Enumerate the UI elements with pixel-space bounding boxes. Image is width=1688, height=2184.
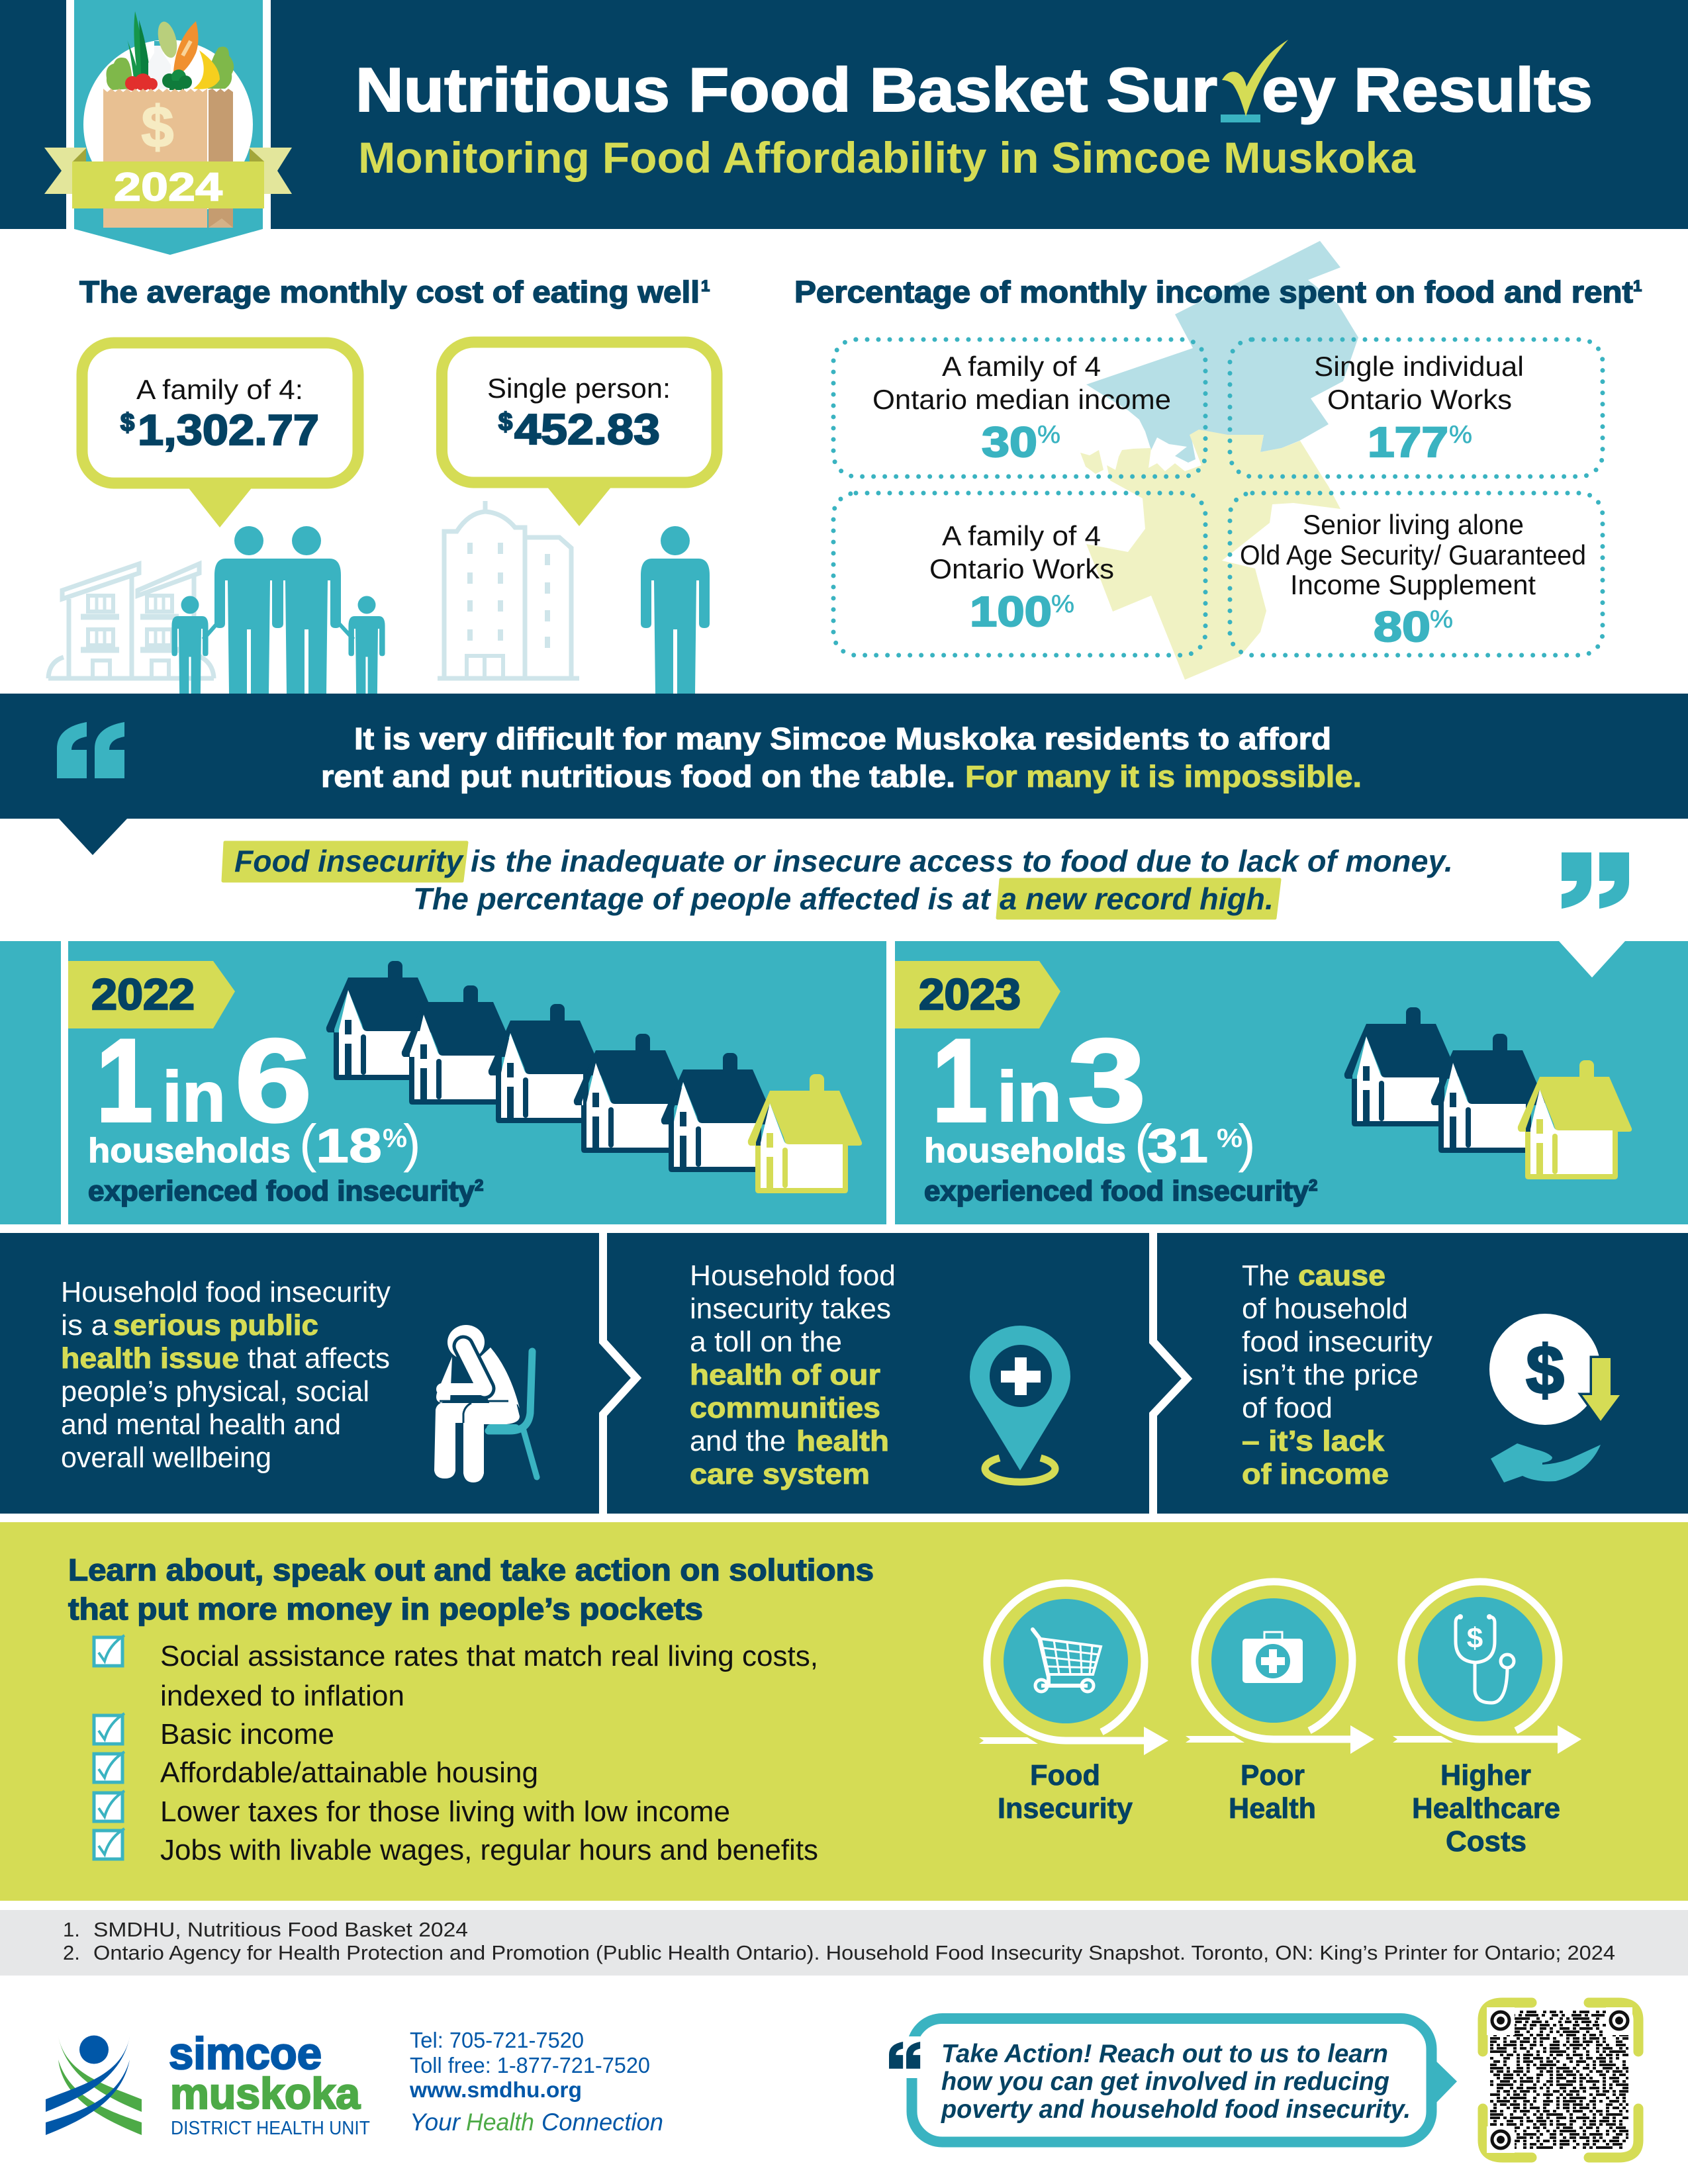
contact details: Tel: 705-721-7520 [410,2028,584,2052]
card: single individual [1230,340,1603,477]
card: single individual: 177 [1368,418,1448,466]
quote text: It is very difficult for many Simcoe Muskoka residents to afford [354,721,1331,756]
callout: single person cost: $ [498,408,512,436]
panel: percentage of income [794,275,1642,655]
icon: opening quote mark [57,722,124,778]
text: toll on communities: Household food [690,1259,896,1292]
footnotes band: 1. [63,1918,80,1941]
icon: stethoscope with dollar: $ [1467,1622,1483,1655]
footnotes band [0,1910,1688,1976]
stat: 1 in 6: 6 [235,1015,312,1146]
quote text [321,721,1362,794]
card: family Ontario Works: 100 [970,588,1052,635]
panel: solutions [0,1522,1688,1901]
card: family Ontario Works: % [1051,590,1074,618]
callout: family of 4 cost: $ [120,409,134,437]
text: serious public health issue: overall wellbeing [61,1441,271,1474]
card: senior living alone: Income Supplement [1290,569,1536,600]
text: toll on communities: insecurity takes [690,1293,891,1325]
text: serious public health issue: serious public [113,1309,318,1342]
card: single individual: % [1449,421,1472,449]
text: cause is lack of income: isn’t the price [1242,1359,1419,1391]
title: Nutritious Food Basket Sur [355,55,1217,124]
card: senior living alone: Old Age Security/ Guaranteed [1240,539,1586,570]
contact details [409,2028,663,2136]
stat: households 31%: 31 [1147,1120,1208,1173]
text: cause is lack of income: food insecurity [1242,1326,1432,1358]
text: cause is lack of income: of income [1242,1458,1389,1490]
footnotes band: 2. [63,1941,80,1964]
text: toll on communities: communities [690,1392,880,1424]
text: toll on communities: and the [690,1425,786,1457]
ribbon: 2024: 2024 [114,165,223,209]
text: cause is lack of income: cause [1298,1259,1385,1292]
stat: households 18%: % [383,1124,407,1153]
card: senior living alone: Senior living alone [1303,509,1524,540]
definition of food insecurity: a new record high. [1000,882,1274,916]
callout: family of 4 cost: 1,302.77 [138,406,319,454]
diagram: higher healthcare costs step [1393,1582,1581,1858]
stat: 1 in 3: in [997,1056,1062,1136]
list: solutions [160,1640,818,1866]
icon: shopping cart [1033,1629,1101,1692]
contact details: Your [410,2109,461,2136]
icon: quote mark [889,2042,920,2069]
icon: closing quote mark [1562,852,1629,909]
callout: family of 4 cost: A family of 4: [136,374,303,405]
logo: Simcoe Muskoka District Health Unit: simcoe [169,2028,322,2079]
text: cause is lack of income: – it’s lack [1242,1425,1385,1457]
contact details: Health [466,2109,534,2136]
icon: paper bag [103,89,233,228]
stat: households 31%: ( [1135,1114,1152,1173]
text: cause is lack of income: of household [1242,1293,1408,1325]
text: serious public health issue: is a [61,1309,109,1342]
contact details: www.smdhu.org [409,2077,582,2102]
text: cause is lack of income: of food [1242,1392,1333,1424]
callout: single person cost: Single person: [487,373,671,404]
panel: 2022 statistic [68,941,886,1224]
arrow: chevron divider 1 [603,1233,636,1514]
caption: experienced food insecurity: 2 [475,1177,483,1195]
card: single individual: Single individual [1314,351,1524,382]
text: serious public health issue: health issue [61,1342,239,1375]
card: senior living alone [1230,493,1603,655]
quote text: For many it is impossible. [965,759,1362,794]
stat: households 18%: 18 [316,1120,382,1173]
stat: 1 in 6: in [162,1056,226,1136]
label: Food Insecurity [998,1759,1133,1825]
definition of food insecurity [223,842,1629,918]
stat: households 18%: ) [403,1114,421,1173]
callout: single person cost: 452.83 [514,405,660,453]
quote text: rent and put nutritious food on the table. [321,759,955,794]
stat: households 31% [924,1114,1256,1173]
stat: households 31%: ) [1238,1114,1256,1173]
text: serious public health issue: that affects [248,1342,390,1375]
icon: location pin with cross [970,1326,1070,1482]
icon: coin with down arrow and hand [1489,1314,1620,1482]
heading: monthly cost: 1 [701,277,710,295]
list: solutions: Social assistance rates that match real living costs, [160,1640,818,1672]
definition of food insecurity: Food insecurity [234,844,464,878]
icon: paper bag: $ [142,94,173,159]
card: family median income [833,340,1205,477]
callout: take action: poverty and household food insecurity. [941,2095,1411,2124]
list: solutions: indexed to inflation [160,1680,404,1712]
icon: townhouses [48,564,214,678]
icon: first aid kit [1243,1632,1303,1683]
text: serious public health issue [61,1276,391,1474]
heading: percentage of income: Percentage of monthly income spent on food and rent [794,275,1633,309]
callout: family of 4 cost [82,343,358,527]
card: family median income: A family of 4 [942,351,1101,382]
icon: vegetables [106,11,234,91]
subtitle: Monitoring Food Affordability in Simcoe Muskoka [358,133,1416,182]
icon: survey checkmark [1221,40,1288,122]
stat: households 18% [88,1114,421,1173]
heading: take action on solutions: Learn about, speak out and take action on solutions [68,1553,874,1587]
tag: 2022: 2022 [91,970,195,1019]
header band [0,0,1688,229]
ribbon: 2024 [44,148,292,209]
list: solutions: Jobs with livable wages, regular hours and benefits [160,1834,818,1866]
text: toll on communities [690,1259,896,1490]
stat: households 31%: % [1217,1124,1243,1153]
stat: 1 in 6: 1 [96,1015,153,1146]
stat: households 18%: households [88,1132,291,1170]
heading: monthly cost: The average monthly cost of eating well [79,275,700,309]
card: family median income: 30 [982,418,1037,466]
tag: 2023: 2023 [919,970,1021,1019]
panel: 2023 statistic [895,941,1688,1224]
icon: row of houses, 1 highlighted [1344,1007,1632,1179]
text: serious public health issue: people’s physical, social [61,1375,369,1408]
heading: take action on solutions: that put more money in people’s pockets [68,1592,703,1626]
list: solutions: Lower taxes for those living with low income [160,1796,730,1828]
quote band [0,694,1688,855]
heading: percentage of income: 1 [1633,277,1642,295]
contact details: Toll free: 1-877-721-7520 [410,2053,650,2077]
label: Poor Health: Health [1229,1792,1316,1825]
callout: take action: how you can get involved in reducing [941,2068,1389,2096]
list: solutions: Basic income [160,1718,334,1751]
title: v [1225,55,1259,124]
tag: 2023 [895,961,1060,1028]
label: Higher Healthcare Costs: Costs [1446,1825,1526,1858]
card: senior living alone: % [1430,606,1453,633]
callout: single person cost [442,342,717,526]
stat: households 31%: households [924,1132,1126,1170]
stat: households 18%: ( [299,1114,317,1173]
heading: take action on solutions [68,1553,874,1626]
list: solutions: Affordable/attainable housing [160,1756,538,1789]
tag: 2022 [68,961,235,1028]
card: family Ontario Works [833,493,1205,655]
panel: average monthly cost [48,275,717,694]
label: Higher Healthcare Costs [1412,1759,1560,1858]
card: family Ontario Works: A family of 4 [942,520,1101,551]
callout: take action [889,2019,1457,2142]
callout: take action: Take Action! Reach out to us to learn [941,2040,1388,2068]
card: senior living alone: 80 [1374,603,1430,651]
label: Food Insecurity: Food [1030,1759,1100,1792]
icon: checkboxes [94,1635,124,1859]
text: serious public health issue: and mental health and [61,1408,341,1441]
QR code with brackets [1483,2003,1638,2158]
text: serious public health issue: Household food insecurity [61,1276,391,1308]
title: ey Results [1262,55,1593,124]
label: Food Insecurity: Insecurity [998,1792,1133,1825]
label: Poor Health: Poor [1241,1759,1305,1792]
icon: logo figure [46,2036,142,2135]
definition of food insecurity: The percentage of people affected is at [413,882,992,916]
panel: dark information band [0,1233,1688,1514]
text: cause is lack of income [1242,1259,1432,1490]
icon: coin with down arrow and hand: $ [1526,1332,1564,1409]
label: Poor Health [1229,1759,1316,1825]
card: family Ontario Works: Ontario Works [929,553,1114,584]
logo: Simcoe Muskoka District Health Unit: DISTRICT HEALTH UNIT [171,2118,370,2139]
diagram: food insecurity step [979,1583,1168,1825]
contact details: Connection [541,2109,663,2136]
text: toll on communities: health [796,1425,889,1457]
text: toll on communities: health of our [690,1359,880,1391]
caption: experienced food insecurity: experienced food insecurity [88,1175,475,1207]
stat: 1 in 3: 1 [932,1015,988,1146]
logo: Simcoe Muskoka District Health Unit: muskoka [170,2069,361,2118]
icon: single figure [641,526,710,694]
footnotes band: Ontario Agency for Health Protection and Promotion (Public Health Ontario). Household Food Insecurity Snapshot. Toronto, ON: King’s Printer for Ontario; 2024 [93,1941,1615,1964]
icon: stethoscope with dollar [1456,1614,1514,1703]
icon: person sitting in chair [434,1325,537,1482]
icon: apartment tower [438,501,579,678]
text: toll on communities: care system [690,1458,870,1490]
definition of food insecurity: is the inadequate or insecure access to food due to lack of money. [471,844,1453,878]
text: cause is lack of income: The [1242,1259,1289,1292]
arrow: chevron divider 2 [1153,1233,1187,1514]
card: family median income: % [1037,421,1060,449]
label: Higher Healthcare Costs: Higher [1440,1759,1531,1792]
panel: teal edge [0,941,61,1224]
caption: experienced food insecurity: experienced food insecurity [924,1175,1309,1207]
footnotes band: SMDHU, Nutritious Food Basket 2024 [93,1918,468,1941]
icon: family figures [171,526,385,694]
logo: Simcoe Muskoka District Health Unit [46,2028,370,2139]
label: Higher Healthcare Costs: Healthcare [1412,1792,1560,1825]
map of Simcoe Muskoka [1080,241,1358,680]
stat: 1 in 3: 3 [1068,1015,1146,1146]
caption: experienced food insecurity: 2 [1309,1177,1317,1195]
card: single individual: Ontario Works [1327,384,1512,415]
icon: row of houses, 1 highlighted [326,961,862,1193]
text: toll on communities: a toll on the [690,1326,842,1358]
card: family median income: Ontario median income [872,384,1171,415]
diagram: poor health step [1186,1582,1374,1825]
badge: grocery bag 2024 [44,0,292,255]
